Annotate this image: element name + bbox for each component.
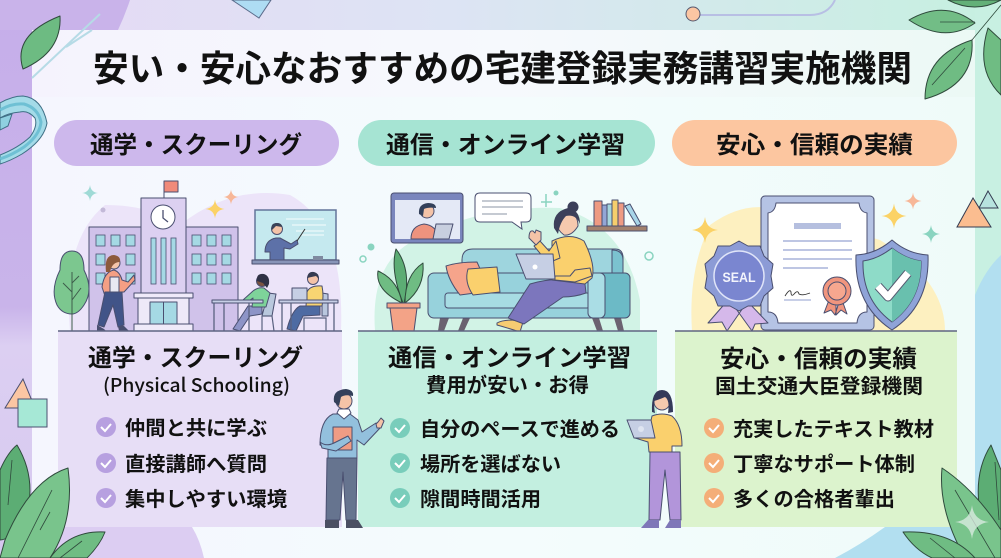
woman on sofa xyxy=(497,202,593,332)
pill: trust xyxy=(672,120,957,166)
certificate sheet xyxy=(761,196,874,330)
checklist: 場所を選ばない xyxy=(420,453,561,476)
icon: triangles right xyxy=(957,191,998,227)
illustration: certificate xyxy=(691,192,945,331)
checklist: 集中しやすい環境 xyxy=(125,488,287,511)
checklist xyxy=(390,418,620,511)
pill: schooling xyxy=(54,120,339,166)
student left xyxy=(212,274,276,331)
panel title: 安心・信頼の実績 xyxy=(720,346,917,373)
icon: leaves bottom right xyxy=(903,445,1001,558)
video call screen xyxy=(391,193,463,243)
checklist: 多くの合格者輩出 xyxy=(733,488,895,511)
checklist: 丁寧なサポート体制 xyxy=(733,453,915,476)
decoration: blue diamond xyxy=(232,0,271,18)
illustration: man with clipboard xyxy=(320,389,384,528)
tree xyxy=(54,251,89,331)
pill: schooling: 通学・スクーリング xyxy=(90,131,302,159)
panel subtitle: 費用が安い・お得 xyxy=(426,373,589,397)
panel: schooling xyxy=(58,331,342,527)
icon: triangle and square xyxy=(5,379,47,427)
panel title: 通学・スクーリング xyxy=(88,344,303,372)
sofa xyxy=(428,249,630,331)
seal xyxy=(705,241,773,331)
checklist: 仲間と共に学ぶ xyxy=(125,417,267,440)
illustration: woman with laptop xyxy=(627,390,682,528)
icon: leaves top right xyxy=(909,0,1001,99)
checklist: 自分のペースで進める xyxy=(420,418,620,441)
sparkle marks xyxy=(360,190,653,262)
blackboard with teacher xyxy=(252,210,339,264)
student right xyxy=(279,272,338,331)
illustration: online learning xyxy=(360,190,653,332)
pill: online xyxy=(358,120,655,166)
icon: leaves bottom left xyxy=(0,445,105,558)
pillows xyxy=(446,262,500,295)
plant xyxy=(378,249,423,331)
panel subtitle: (Physical Schooling) xyxy=(103,371,290,398)
decoration: connector with peach dot xyxy=(686,0,835,21)
checklist: 充実したテキスト教材 xyxy=(733,418,934,441)
building xyxy=(89,181,238,331)
checklist: 隙間時間活用 xyxy=(420,488,541,511)
speech bubble xyxy=(475,193,531,229)
pill: trust: 安心・信頼の実績 xyxy=(716,132,913,159)
decoration: faint lines xyxy=(32,14,100,78)
illustration: school xyxy=(54,181,341,331)
seal: SEAL xyxy=(722,269,756,285)
woman with books xyxy=(97,255,135,331)
pill: online: 通信・オンライン学習 xyxy=(386,132,625,159)
icon: teal ribbon xyxy=(0,96,47,164)
icon: leaf top left xyxy=(21,16,60,69)
panel title: 通信・オンライン学習 xyxy=(388,345,631,372)
checklist xyxy=(96,417,287,511)
shield xyxy=(856,240,928,330)
panel: online xyxy=(358,331,657,527)
bookshelf xyxy=(587,200,647,231)
panel: trust xyxy=(675,331,957,527)
heading: main title: 安い・安心なおすすめの宅建登録実務講習実施機関 xyxy=(93,48,912,89)
checklist: 直接講師へ質問 xyxy=(125,453,267,476)
panel subtitle: 国土交通大臣登録機関 xyxy=(715,375,923,398)
checklist xyxy=(704,418,934,511)
